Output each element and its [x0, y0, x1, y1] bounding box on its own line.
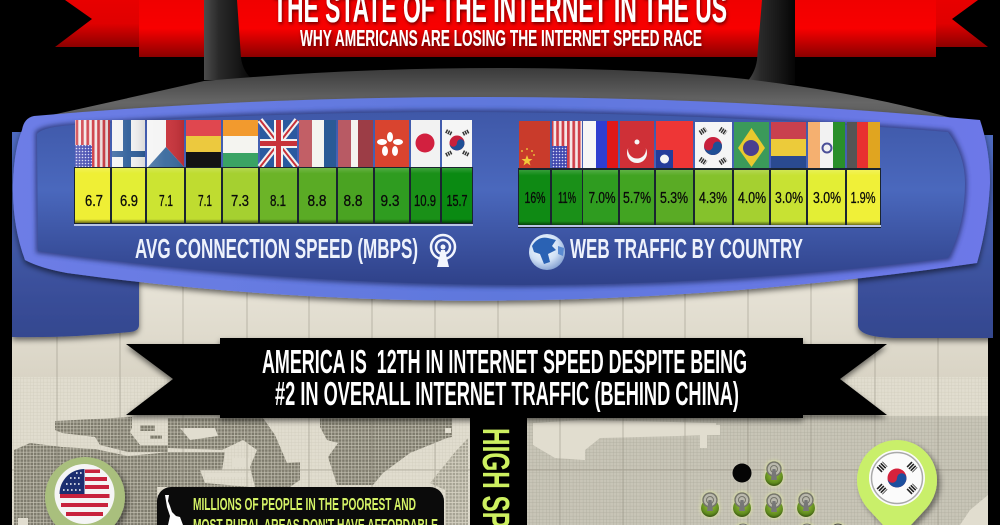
flag: South Korea — [442, 120, 472, 167]
flag: Taiwan — [656, 121, 693, 168]
cell: Ireland 7.3: 7.3 — [231, 193, 249, 210]
cell: Japan 10.9 — [411, 168, 440, 223]
cell: India 3.0%: 3.0% — [813, 190, 841, 207]
antenna left — [204, 0, 253, 80]
cell: Romania 3.0% — [771, 170, 806, 225]
cell: Germany 1.9% — [847, 170, 880, 225]
cell: USA 11% — [552, 170, 582, 225]
cell: Latvia 8.8 — [338, 168, 373, 223]
callout text — [193, 494, 438, 525]
cell: Finland 6.9: 6.9 — [120, 193, 138, 210]
flags: web traffic countries — [519, 121, 880, 168]
flag: Czech Republic — [147, 120, 184, 167]
flag: Finland — [112, 120, 145, 167]
flag: Latvia — [338, 120, 373, 167]
label: web traffic by country: WEB TRAFFIC BY COUNTRY — [570, 233, 803, 264]
cell: Belgium 7.1: 7.1 — [198, 193, 212, 210]
foot right — [858, 135, 993, 338]
cell: USA 6.7: 6.7 — [85, 193, 103, 210]
cell: Brazil 4.0%: 4.0% — [738, 190, 766, 207]
banner: black headline ribbon — [126, 338, 887, 418]
flag: USA circle — [60, 469, 110, 519]
icon: globe — [529, 234, 565, 270]
flag: USA — [552, 121, 582, 168]
router body — [13, 97, 990, 301]
banner: red title ribbon — [55, 0, 988, 57]
cell: Netherlands 8.8: 8.8 — [308, 193, 327, 210]
cell: Finland 6.9 — [112, 168, 145, 223]
cell: South Korea 15.7: 15.7 — [446, 193, 468, 210]
ribbon tail right — [803, 344, 887, 415]
antenna pin 1 — [765, 462, 783, 486]
flag: South Korea circle — [879, 464, 915, 492]
cell: Brazil 4.0% — [734, 170, 769, 225]
pin: USA — [45, 457, 125, 525]
cell: South Korea 15.7 — [442, 168, 472, 223]
antenna pin tops at bottom edge — [736, 524, 845, 525]
value cells: web traffic — [518, 168, 881, 228]
label: average connection speed: AVG CONNECTION SPEED (MBPS) — [135, 233, 418, 264]
cell: Czech Republic 7.1 — [147, 168, 184, 223]
icon: statue of liberty — [165, 495, 183, 525]
router outer rim — [13, 97, 990, 301]
cell: Latvia 8.8: 8.8 — [344, 193, 363, 210]
cell: South Korea 4.3% — [695, 170, 732, 225]
cell: Russia 7.0%: 7.0% — [588, 190, 616, 207]
ribbon tail left — [55, 0, 139, 47]
ribbon tail left — [126, 344, 220, 415]
cell: Ireland 7.3 — [223, 168, 258, 223]
cell: South Korea 4.3%: 4.3% — [699, 190, 727, 207]
map: pale gaps in land — [18, 428, 451, 525]
panel: paper and world map — [12, 270, 988, 525]
flag: Netherlands — [299, 120, 336, 167]
flag: Japan — [411, 120, 440, 167]
flag: India — [808, 122, 845, 168]
flag: Russia — [583, 121, 618, 168]
cell: Taiwan 5.3% — [656, 170, 693, 225]
headline text — [262, 343, 747, 412]
flag: Ireland — [223, 120, 258, 167]
antenna pin 4 — [765, 494, 783, 518]
flag: China — [519, 121, 550, 168]
cell: Taiwan 5.3%: 5.3% — [660, 190, 688, 207]
map: land specks in pale gap — [140, 425, 162, 439]
callout text: MILLIONS OF PEOPLE IN THE POOREST AND — [193, 494, 416, 514]
cell: China 16%: 16% — [524, 190, 546, 207]
antenna pin 2 — [701, 493, 719, 517]
flags: connection speed countries — [75, 120, 472, 167]
cell: Netherlands 8.8 — [299, 168, 336, 223]
flag: Turkey — [620, 121, 654, 168]
ribbon body — [139, 0, 936, 57]
value cells: connection speed — [74, 167, 473, 226]
map: lighter land far right of left map — [430, 438, 468, 525]
chart: average connection speed — [74, 120, 473, 267]
cell: Japan 10.9: 10.9 — [414, 193, 436, 210]
subtitle: WHY AMERICANS ARE LOSING THE INTERNET SPEED RACE — [300, 25, 702, 51]
cell: China 16% — [519, 170, 550, 225]
pin: South Korea — [857, 440, 937, 525]
flag: USA — [75, 120, 110, 167]
cell: Hong Kong 9.3 — [375, 168, 409, 223]
cell: Turkey 5.7%: 5.7% — [623, 190, 651, 207]
map: pale patches on right map — [533, 420, 988, 525]
cell: Belgium 7.1 — [186, 168, 221, 223]
foot left — [12, 132, 139, 337]
cell: Hong Kong 9.3: 9.3 — [380, 193, 400, 210]
map: dark land masses left — [14, 417, 452, 525]
flag: Belgium — [186, 120, 221, 167]
flag: Romania — [771, 122, 806, 168]
ribbon tail right — [936, 0, 988, 47]
chart: web traffic by country — [518, 121, 881, 270]
callout: rural access — [157, 487, 444, 525]
flag: UK — [260, 120, 297, 167]
router inner panel — [37, 112, 965, 285]
cell: UK 8.1 — [260, 168, 297, 223]
antenna pin 3 — [733, 493, 751, 517]
map: grid lines — [12, 270, 988, 525]
cell: Turkey 5.7% — [620, 170, 654, 225]
flag: Hong Kong — [375, 120, 409, 167]
router gray top — [38, 68, 975, 130]
cell: Russia 7.0% — [583, 170, 618, 225]
cell: India 3.0% — [808, 170, 845, 225]
antenna pin 5 — [797, 493, 815, 517]
vertical bar: high speed — [470, 418, 527, 525]
router inner panel shadow — [35, 110, 967, 287]
cell: USA 6.7 — [75, 168, 110, 223]
ribbon body — [220, 338, 803, 418]
cell: Germany 1.9%: 1.9% — [850, 190, 876, 207]
cell: Czech Republic 7.1: 7.1 — [159, 193, 173, 210]
antenna right — [745, 0, 795, 84]
cell: USA 11%: 11% — [558, 190, 576, 207]
marker: black dot — [732, 464, 752, 482]
router feet — [12, 132, 993, 338]
cell: Romania 3.0%: 3.0% — [775, 190, 803, 207]
antenna pins: speed markers — [701, 462, 845, 525]
flag: South Korea — [695, 122, 732, 168]
flag: Brazil — [734, 122, 769, 168]
cell: UK 8.1: 8.1 — [270, 193, 286, 210]
icon: broadcast antenna — [431, 235, 455, 267]
flag: Germany — [847, 122, 880, 168]
